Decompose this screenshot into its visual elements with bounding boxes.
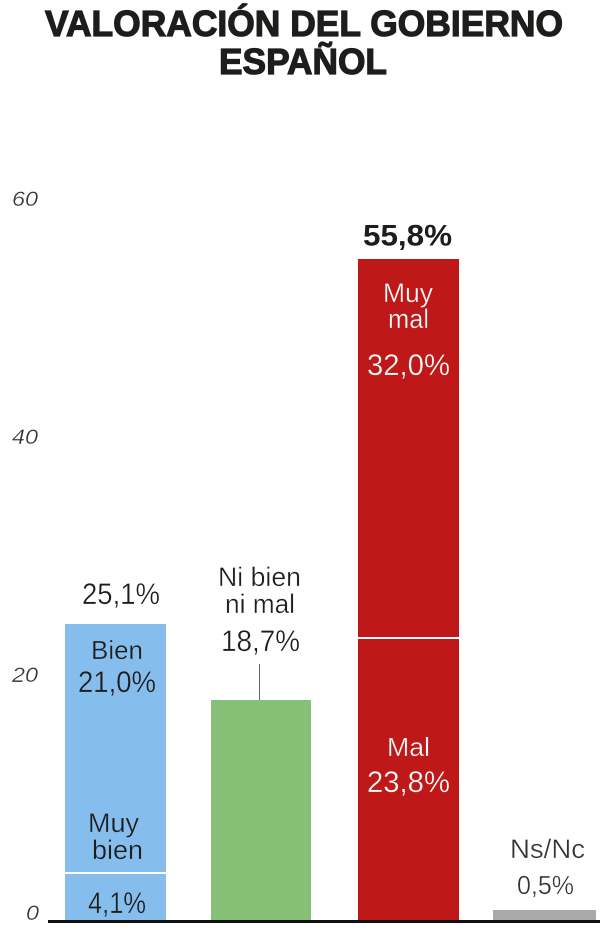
y axis labels: 60 — [12, 187, 38, 211]
segment: muy bien — [65, 874, 166, 920]
segment: bien: Bien — [91, 635, 143, 665]
segment: mal — [358, 639, 459, 920]
bar: mal total — [358, 259, 459, 920]
label: ni bien ni mal: 18,7% — [221, 625, 300, 658]
segment: bien: Muy — [88, 808, 139, 838]
bar: bien total — [65, 624, 166, 920]
label: ni bien ni mal — [218, 562, 301, 658]
value label: 25,1%: 25,1% — [82, 578, 160, 611]
label: ns/nc: Ns/Nc — [510, 834, 585, 864]
label: ni bien ni mal: Ni bien — [218, 562, 301, 592]
segment: muy mal: 32,0% — [367, 349, 450, 382]
segment: muy mal — [358, 259, 459, 637]
segment: muy mal: Muy — [383, 278, 433, 308]
segment: bien: 21,0% — [78, 666, 156, 699]
segment: mal: 23,8% — [367, 766, 450, 799]
title — [45, 2, 563, 82]
y axis labels: 20 — [11, 663, 38, 687]
label: ni bien ni mal: ni mal — [225, 589, 295, 619]
title: VALORACIÓN DEL GOBIERNO — [45, 2, 563, 44]
title: ESPAÑOL — [219, 40, 387, 82]
segment: mal: Mal — [387, 732, 430, 762]
leader line — [259, 664, 260, 700]
value label: 55,8%: 55,8% — [363, 220, 452, 252]
bar: ns/nc — [493, 910, 596, 920]
segment: muy bien: 4,1% — [88, 887, 146, 920]
y axis labels: 40 — [12, 425, 38, 449]
y axis labels — [11, 187, 39, 925]
label: ns/nc: 0,5% — [517, 870, 574, 900]
y axis labels: 0 — [26, 901, 39, 925]
baseline axis — [48, 920, 600, 923]
segment: bien — [65, 624, 166, 872]
label: ns/nc — [510, 834, 585, 900]
segment: muy mal: mal — [388, 304, 429, 334]
bar: ni bien ni mal — [211, 700, 311, 920]
segment: bien: bien — [92, 835, 143, 865]
